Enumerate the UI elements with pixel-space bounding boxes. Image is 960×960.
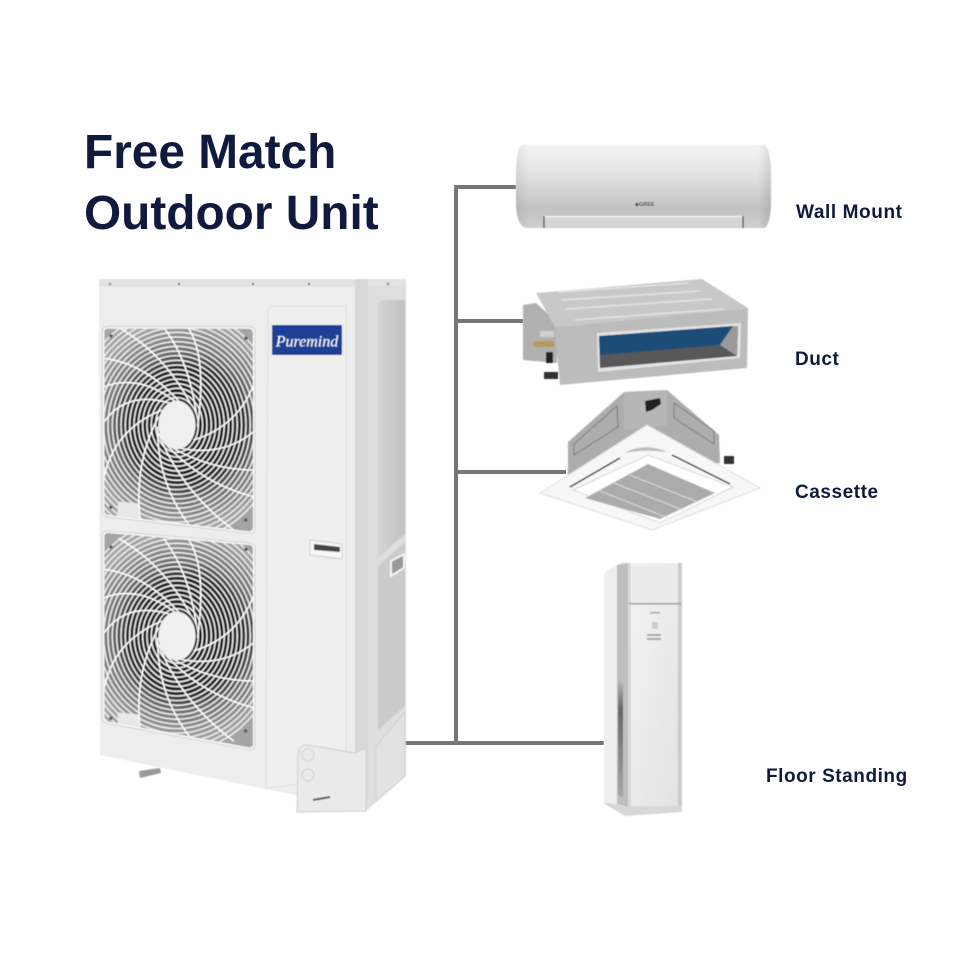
brand mark: ⬥GREE xyxy=(634,202,655,208)
top screws xyxy=(109,283,389,285)
front handle xyxy=(310,540,342,559)
outdoor unit xyxy=(73,279,406,812)
upper fan grille xyxy=(102,326,256,534)
unit front face xyxy=(99,279,366,812)
brand badge xyxy=(272,325,342,355)
duct blue coil xyxy=(599,326,733,355)
side handle xyxy=(391,554,404,576)
service panel xyxy=(266,306,346,788)
cassette panel xyxy=(540,425,760,530)
label: floor standing: Floor Standing xyxy=(766,766,908,787)
lower fan grille xyxy=(102,530,256,750)
corner bracket xyxy=(297,712,405,812)
cassette unit xyxy=(540,390,760,530)
label: duct: Duct xyxy=(795,349,840,370)
side inset panel xyxy=(378,300,405,558)
unit side face xyxy=(366,279,406,811)
floor standing unit xyxy=(603,562,682,816)
wall mount unit xyxy=(516,145,771,228)
label: cassette: Cassette xyxy=(795,482,879,503)
title: Free Match xyxy=(84,126,336,179)
foot xyxy=(139,768,161,778)
connecting pipes xyxy=(402,187,604,745)
brand badge: Puremind xyxy=(275,334,339,350)
cassette grille xyxy=(585,464,715,519)
label: wall mount: Wall Mount xyxy=(796,202,903,223)
cassette pipe xyxy=(645,398,661,412)
duct valves xyxy=(534,331,558,379)
title: Outdoor Unit xyxy=(84,187,379,240)
floor unit display xyxy=(647,612,661,640)
duct unit xyxy=(523,279,748,385)
